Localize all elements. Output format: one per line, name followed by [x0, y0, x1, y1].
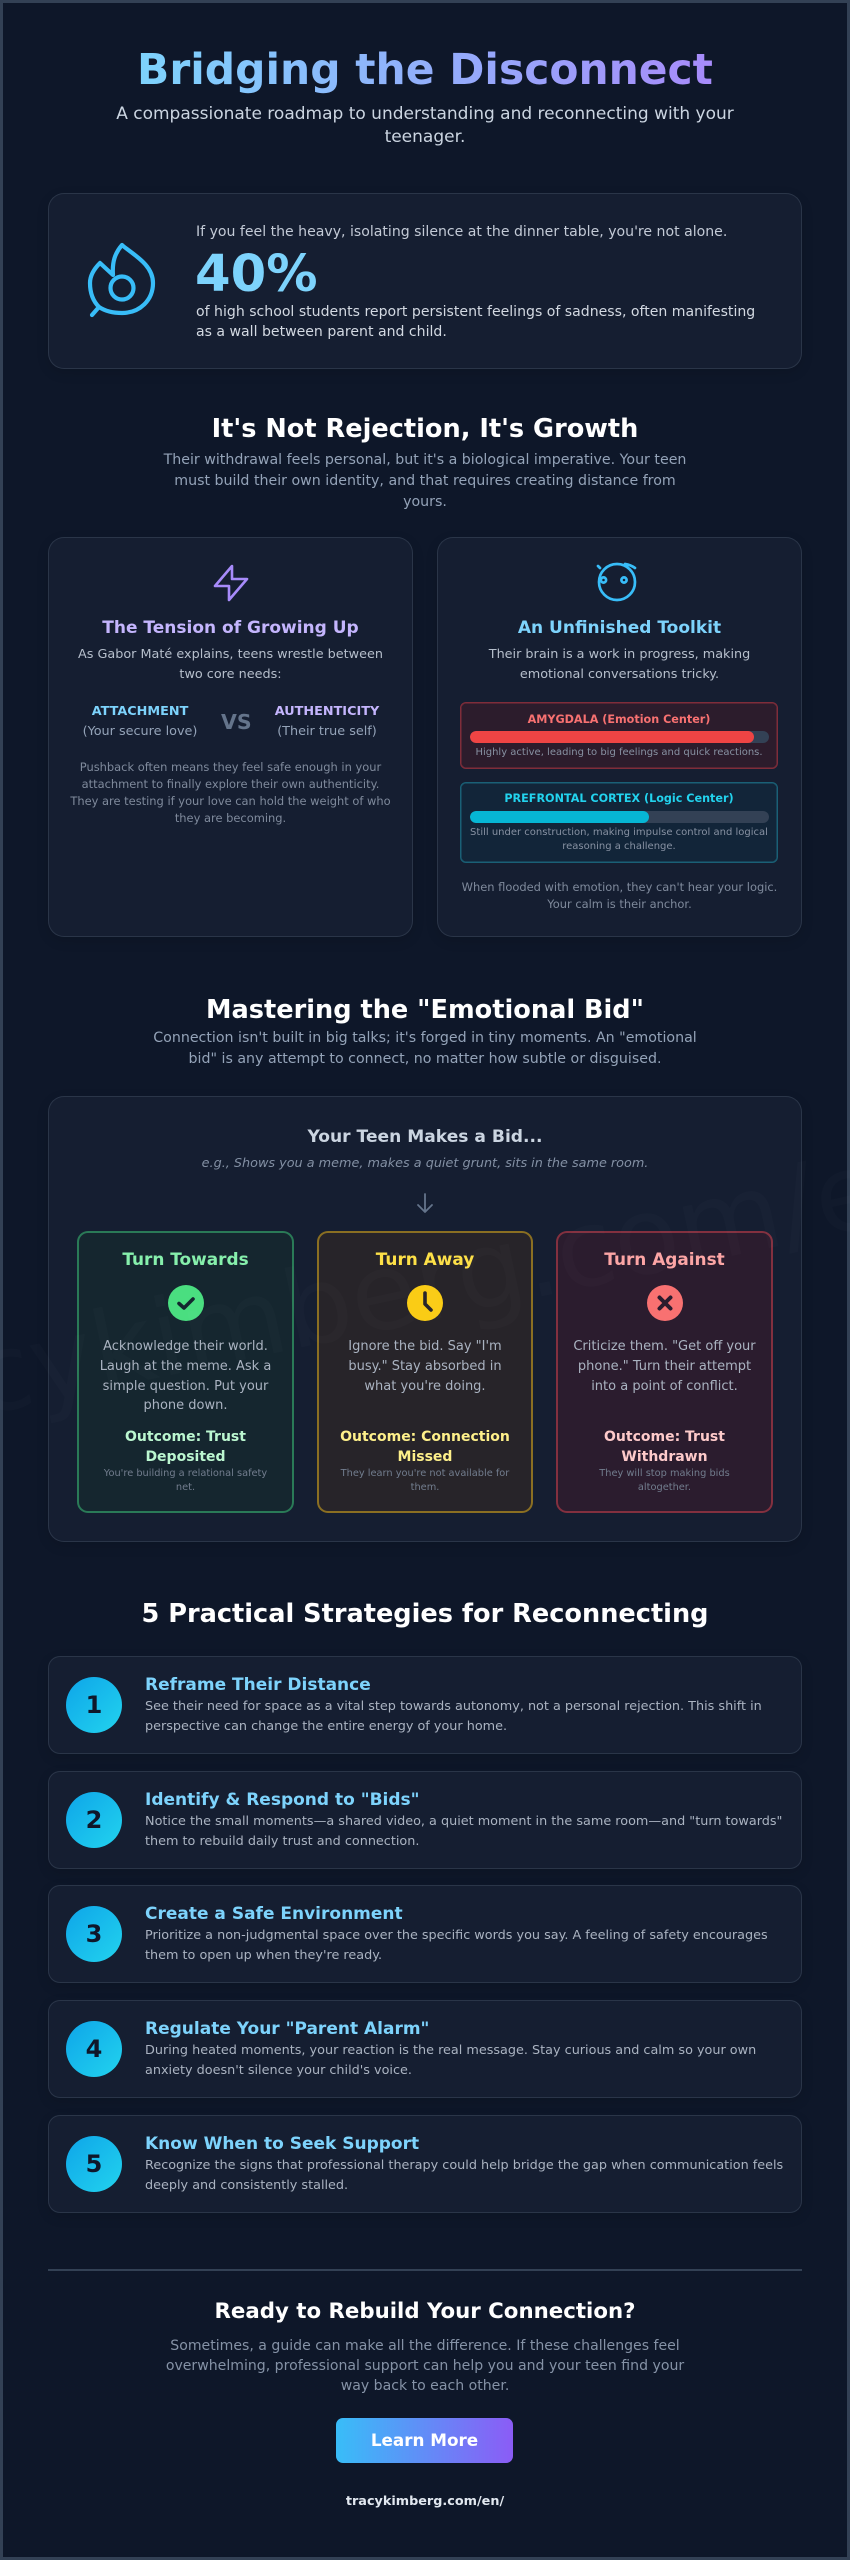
outcome [340, 1429, 510, 1465]
intro text: Their withdrawal feels personal, but it's a biological imperative. Your teen [164, 452, 686, 468]
card description: two core needs: [179, 667, 282, 682]
strategy text: Recognize the signs that professional therapy could help bridge the gap when communication feels [145, 2158, 783, 2173]
strategy title: Know When to Seek Support [145, 2134, 419, 2154]
strategy text [145, 1814, 782, 1849]
attachment [83, 704, 197, 739]
number badge: 4 [86, 2035, 102, 2063]
button [336, 2418, 513, 2463]
card title: An Unfinished Toolkit [518, 618, 721, 638]
strategy 4 [48, 2000, 802, 2098]
card description: As Gabor Maté explains, teens wrestle between [78, 647, 383, 662]
intro text [164, 452, 686, 510]
number badge [66, 1677, 122, 1733]
option description: what you're doing. [364, 1379, 486, 1394]
prefrontal text [470, 827, 768, 852]
attachment: ATTACHMENT [92, 704, 188, 719]
card description [488, 647, 750, 682]
outcome note [599, 1468, 730, 1493]
attachment: (Your secure love) [83, 724, 197, 739]
section: growth heading [164, 414, 686, 510]
option description: into a point of conflict. [591, 1379, 738, 1394]
prefrontal cortex box [460, 782, 778, 863]
strategy text: Prioritize a non-judgmental space over the specific words you say. A feeling of safety encourages [145, 1928, 768, 1943]
title: Bridging the Disconnect [137, 45, 713, 94]
number badge [66, 1906, 122, 1962]
outcome: Withdrawn [621, 1449, 708, 1465]
strategy text [145, 2158, 783, 2193]
card note: Pushback often means they feel safe enough in your [80, 760, 381, 774]
intro text: bid" is any attempt to connect, no matter how subtle or disguised. [189, 1051, 661, 1067]
amygdala box [460, 702, 778, 769]
outcome: Deposited [145, 1449, 226, 1465]
stat description [196, 304, 755, 340]
number badge: 1 [86, 1691, 102, 1719]
prefrontal label: PREFRONTAL CORTEX (Logic Center) [504, 792, 734, 805]
bid heading: Your Teen Makes a Bid... [307, 1127, 543, 1147]
strategy text: deeply and consistently stalled. [145, 2178, 348, 2193]
card note: attachment to finally explore their own authenticity. [82, 777, 379, 791]
strategy text [145, 2043, 756, 2078]
stat description: as a wall between parent and child. [196, 324, 447, 340]
strategy title: Reframe Their Distance [145, 1675, 371, 1695]
option title: Turn Away [376, 1249, 474, 1269]
icon: check [168, 1285, 204, 1321]
section: emotional bid heading [153, 995, 697, 1067]
icon: clock [407, 1285, 443, 1321]
number badge [66, 2021, 122, 2077]
option description: simple question. Put your [103, 1379, 268, 1394]
subtitle [116, 104, 734, 147]
strategy 2 [48, 1771, 802, 1869]
option title: Turn Towards [122, 1249, 249, 1269]
heading: Mastering the "Emotional Bid" [206, 995, 644, 1025]
option description: busy." Stay absorbed in [348, 1359, 502, 1374]
versus label: VS [221, 710, 252, 734]
intro text [153, 1030, 697, 1067]
icon: lightning bolt [214, 564, 248, 602]
icon: flame [88, 242, 156, 318]
card description: Their brain is a work in progress, making [489, 647, 750, 662]
strategy 1 [48, 1656, 802, 1754]
option description: Ignore the bid. Say "I'm [348, 1339, 502, 1354]
authenticity [274, 704, 380, 739]
strategy 5 [48, 2115, 802, 2213]
outcome: Outcome: Trust [604, 1429, 725, 1445]
card note: they are becoming. [175, 811, 286, 825]
strategy text [145, 1699, 762, 1734]
outcome note [104, 1468, 267, 1493]
card note [462, 880, 777, 911]
card description [78, 647, 383, 682]
subtitle: A compassionate roadmap to understanding and reconnecting with your [116, 104, 734, 124]
stat description: of high school students report persistent feelings of sadness, often manifesting [196, 304, 755, 320]
strategy text: Notice the small moments—a shared video, a quiet moment in the same room—and "turn towards" [145, 1814, 782, 1829]
strategy text: perspective can change the entire energy of your home. [145, 1719, 507, 1734]
option title: Turn Against [604, 1249, 725, 1269]
intro text: must build their own identity, and that requires creating distance from [174, 473, 676, 489]
outcome: Outcome: Trust [125, 1429, 246, 1445]
subtitle: teenager. [385, 127, 465, 147]
option description: Acknowledge their world. [103, 1339, 268, 1354]
card description: emotional conversations tricky. [520, 667, 719, 682]
outcome: Missed [398, 1449, 452, 1465]
arrow: down [417, 1193, 433, 1213]
heading: It's Not Rejection, It's Growth [212, 414, 638, 444]
strategy title: Regulate Your "Parent Alarm" [145, 2019, 429, 2039]
outcome note: You're building a relational safety [104, 1468, 267, 1479]
icon: cross [647, 1285, 683, 1321]
option description: Criticize them. "Get off your [573, 1339, 756, 1354]
option description [348, 1339, 502, 1394]
cta text: Sometimes, a guide can make all the difference. If these challenges feel [170, 2338, 680, 2354]
prefrontal text: reasoning a challenge. [562, 841, 676, 852]
intro text: Connection isn't built in big talks; it's forged in tiny moments. An "emotional [153, 1030, 697, 1046]
panel: emotional bid flow [48, 1096, 802, 1542]
option description [573, 1339, 756, 1394]
bid examples: e.g., Shows you a meme, makes a quiet grunt, sits in the same room. [202, 1156, 648, 1171]
panel: 40% statistic [48, 193, 802, 369]
outcome [604, 1429, 725, 1465]
card: turn away [317, 1231, 533, 1513]
outcome note: They learn you're not available for [341, 1468, 509, 1479]
cta text: overwhelming, professional support can help you and your teen find your [166, 2358, 684, 2374]
prefrontal bar [470, 811, 769, 823]
cta text [166, 2338, 684, 2394]
outcome note: them. [411, 1482, 439, 1493]
strategy text: During heated moments, your reaction is the real message. Stay curious and calm so your own [145, 2043, 756, 2058]
amygdala label: AMYGDALA (Emotion Center) [528, 713, 710, 726]
strategy 3 [48, 1885, 802, 1983]
card title: The Tension of Growing Up [102, 618, 359, 638]
header [116, 45, 734, 147]
authenticity: AUTHENTICITY [275, 704, 379, 719]
button: Learn More [371, 2430, 478, 2450]
heading: strategies: 5 Practical Strategies for Reconnecting [141, 1599, 708, 1629]
icon: brain face [596, 562, 636, 602]
strategy text: them to rebuild daily trust and connection. [145, 1834, 419, 1849]
strategy title: Create a Safe Environment [145, 1904, 403, 1924]
card note: Your calm is their anchor. [547, 897, 692, 911]
stat number: 40% [195, 244, 318, 304]
amygdala text: Highly active, leading to big feelings and quick reactions. [475, 747, 763, 758]
card note: When flooded with emotion, they can't hear your logic. [462, 880, 777, 894]
cta heading: Ready to Rebuild Your Connection? [215, 2299, 635, 2324]
cta text: way back to each other. [341, 2378, 509, 2394]
outcome: Outcome: Connection [340, 1429, 510, 1445]
number badge: 3 [86, 1920, 102, 1948]
option description: phone down. [143, 1398, 228, 1413]
card: turn against [556, 1231, 773, 1513]
number badge: 2 [86, 1806, 102, 1834]
outcome note: altogether. [638, 1482, 691, 1493]
card note: They are testing if your love can hold the weight of who [70, 794, 391, 808]
outcome [125, 1429, 246, 1465]
call to action [166, 2299, 684, 2509]
strategy title: Identify & Respond to "Bids" [145, 1790, 420, 1810]
panel: an unfinished toolkit [437, 537, 802, 937]
card note [70, 760, 391, 825]
strategy text [145, 1928, 768, 1963]
authenticity: (Their true self) [277, 724, 377, 739]
strategy text: See their need for space as a vital step towards autonomy, not a personal rejection. This shift in [145, 1699, 762, 1714]
option description: Laugh at the meme. Ask a [100, 1359, 271, 1374]
outcome note: They will stop making bids [599, 1468, 730, 1479]
number badge [66, 1792, 122, 1848]
amygdala bar [470, 731, 769, 743]
strategy text: anxiety doesn't silence your child's voice. [145, 2063, 412, 2078]
option description [100, 1339, 271, 1413]
stat intro: If you feel the heavy, isolating silence at the dinner table, you're not alone. [196, 224, 727, 240]
card: turn towards [77, 1231, 294, 1513]
strategy text: them to open up when they're ready. [145, 1948, 382, 1963]
website link: tracykimberg.com/en/ [346, 2494, 504, 2509]
option description: phone." Turn their attempt [578, 1359, 751, 1374]
outcome note: net. [176, 1482, 195, 1493]
outcome note [340, 1468, 510, 1493]
number badge [66, 2136, 122, 2192]
prefrontal text: Still under construction, making impulse control and logical [470, 827, 768, 838]
panel: the tension of growing up [48, 537, 413, 937]
number badge: 5 [86, 2150, 102, 2178]
intro text: yours. [403, 494, 447, 510]
